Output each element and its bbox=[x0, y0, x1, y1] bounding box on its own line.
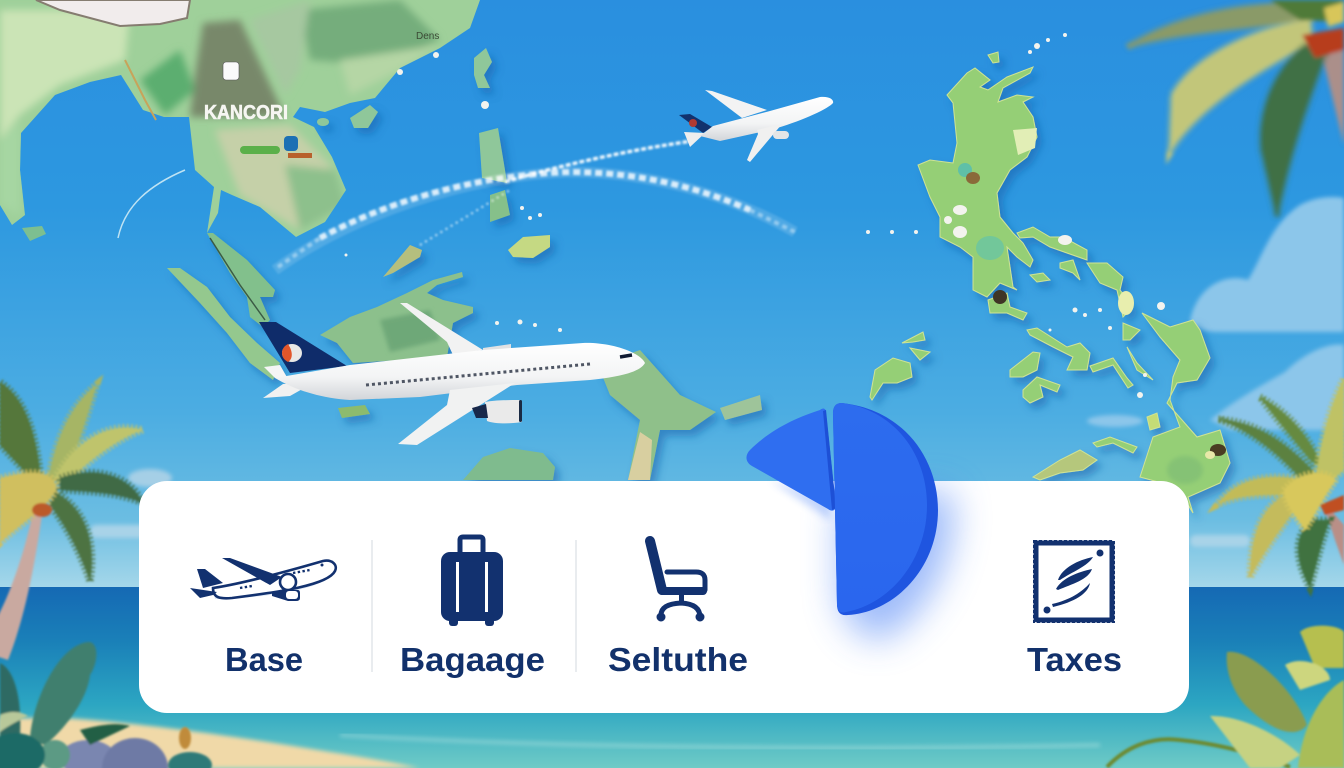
pie slice: large bbox=[833, 403, 938, 615]
label: Bagaage: Bagaage bbox=[400, 641, 545, 678]
pie slice: small bbox=[746, 409, 836, 511]
icon: suitcase (baggage) bbox=[441, 537, 503, 626]
map: central islands bbox=[317, 48, 762, 480]
label: Taxes: Taxes bbox=[1027, 641, 1122, 678]
large airplane bbox=[259, 303, 645, 445]
label: Base: Base bbox=[225, 641, 303, 678]
left palm tree bbox=[0, 382, 143, 660]
bottom-right palm tree bbox=[1217, 378, 1344, 588]
map: white islets bbox=[344, 33, 1165, 398]
label: Seltuthe: Seltuthe bbox=[608, 641, 748, 678]
small airplane bbox=[679, 90, 833, 162]
clouds bbox=[90, 197, 1344, 547]
map: Sumatra and Malay peninsula bbox=[167, 233, 280, 380]
icon: tax stamp bbox=[1034, 541, 1114, 622]
icon: airplane (base fare) bbox=[190, 558, 336, 601]
map label: Kancorn: KANCORI bbox=[204, 102, 288, 124]
flight trails bbox=[275, 141, 795, 270]
map label: Dens: Dens bbox=[416, 31, 439, 42]
logo on tail bbox=[282, 344, 302, 362]
icon: seat bbox=[650, 541, 705, 620]
bottom-left foliage bbox=[0, 642, 212, 768]
map: mainland Southeast Asia bbox=[0, 0, 480, 241]
map marker: green and blue tags bbox=[240, 136, 312, 158]
pie chart: 3D blue slices bbox=[746, 403, 954, 640]
map: island details bbox=[958, 128, 1226, 484]
panel: fare breakdown card bbox=[139, 481, 1189, 713]
top-right palm tree bbox=[1127, 0, 1344, 216]
bottom-right foliage bbox=[1107, 626, 1344, 768]
map: Philippines bbox=[870, 52, 1230, 513]
map pin icon bbox=[223, 62, 239, 80]
